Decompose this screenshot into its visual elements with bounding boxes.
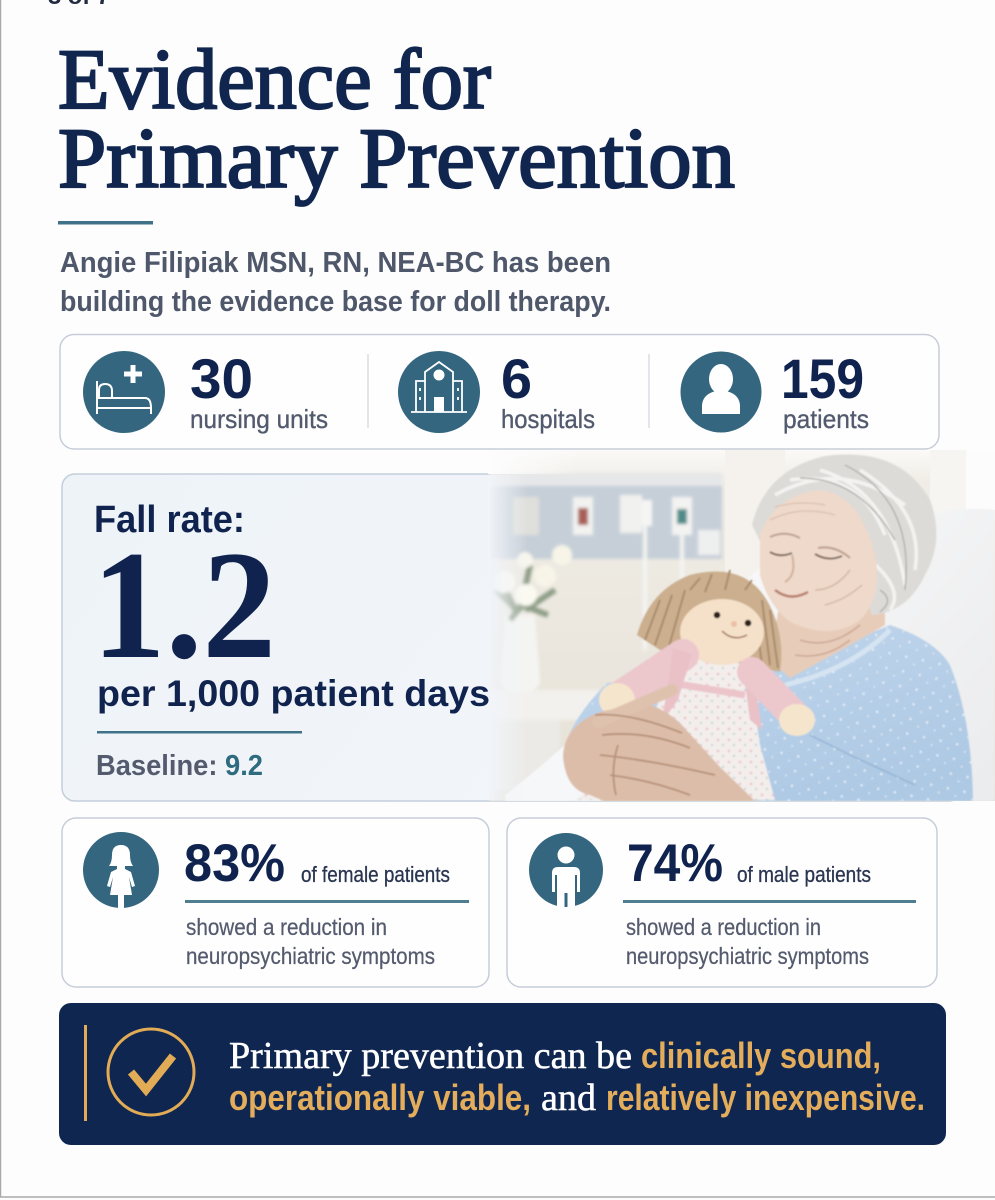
icon: female figure [83,832,159,908]
conclusion text: clinically sound, [641,1035,881,1076]
conclusion text: operationally viable, [229,1077,531,1118]
panel: male patients: showed a reduction in [626,914,821,940]
icon: person [680,352,762,432]
stat: 30 nursing units: nursing units [190,404,328,434]
photo fade overlays [488,450,578,800]
title: Primary Prevention [58,110,735,206]
panel: female patients: neuropsychiatric symptoms [186,943,435,969]
stat: 30 nursing units: 30 [190,347,253,410]
title accent rule [58,221,153,224]
sheet [505,735,600,801]
panel: female patients: 83% [184,834,285,893]
pillow [740,509,995,801]
conclusion text: and [541,1077,596,1119]
panel: female patients: showed a reduction in [186,914,387,940]
doll cardigan and arms [620,655,683,697]
title [58,31,735,206]
stat: 6 hospitals: hospitals [501,404,595,434]
heading: fall rate: Fall rate: [94,499,245,541]
conclusion text: relatively inexpensive. [606,1077,925,1118]
panel: female patients: of female patients [301,862,450,887]
stat: 159 patients [781,347,869,434]
icon: hospital building [398,351,480,433]
baseline value: Baseline: 9.2 [96,750,263,782]
doll hands [599,683,635,717]
icon: hospital bed [83,351,165,433]
panel: male patients: of male patients [737,862,871,887]
fall rate content [92,499,490,782]
title: Evidence for [58,31,491,127]
stat: 30 nursing units [190,347,328,434]
subtitle: Angie Filipiak MSN, RN, NEA-BC has been [60,247,611,279]
stat: 159 patients: 159 [781,347,864,410]
face [760,490,877,631]
neck [776,608,886,678]
panel: study scale stats [60,334,939,449]
illustration: patient hugging a doll in a hospital bed [487,450,995,801]
stat: 159 patients: patients [783,404,869,434]
panel: conclusion banner [59,1003,946,1145]
gown [563,625,973,801]
patient hands [563,703,755,801]
panel: male patients: neuropsychiatric symptoms [626,943,869,969]
subtitle: building the evidence base for doll therapy. [60,286,611,318]
icon: gold check mark [108,1029,194,1115]
stat: 6 hospitals: 6 [501,347,532,410]
doll face [680,599,764,665]
stat: 6 hospitals [501,347,595,434]
panel: male patients [507,818,937,987]
panel: male patients: 74% [627,834,723,893]
unit: per 1,000 patient days: per 1,000 patient days [97,673,490,714]
panel: female patients [62,818,489,987]
conclusion text: Primary prevention can be [229,1035,632,1077]
panel: fall rate card background [62,474,962,801]
hair [752,454,936,615]
conclusion text [229,1035,925,1119]
doll dress [575,655,775,800]
big number: 1.2: 1.2 [92,519,276,691]
subtitle [60,247,611,318]
doll hair [637,572,781,672]
icon: male figure [529,833,603,907]
